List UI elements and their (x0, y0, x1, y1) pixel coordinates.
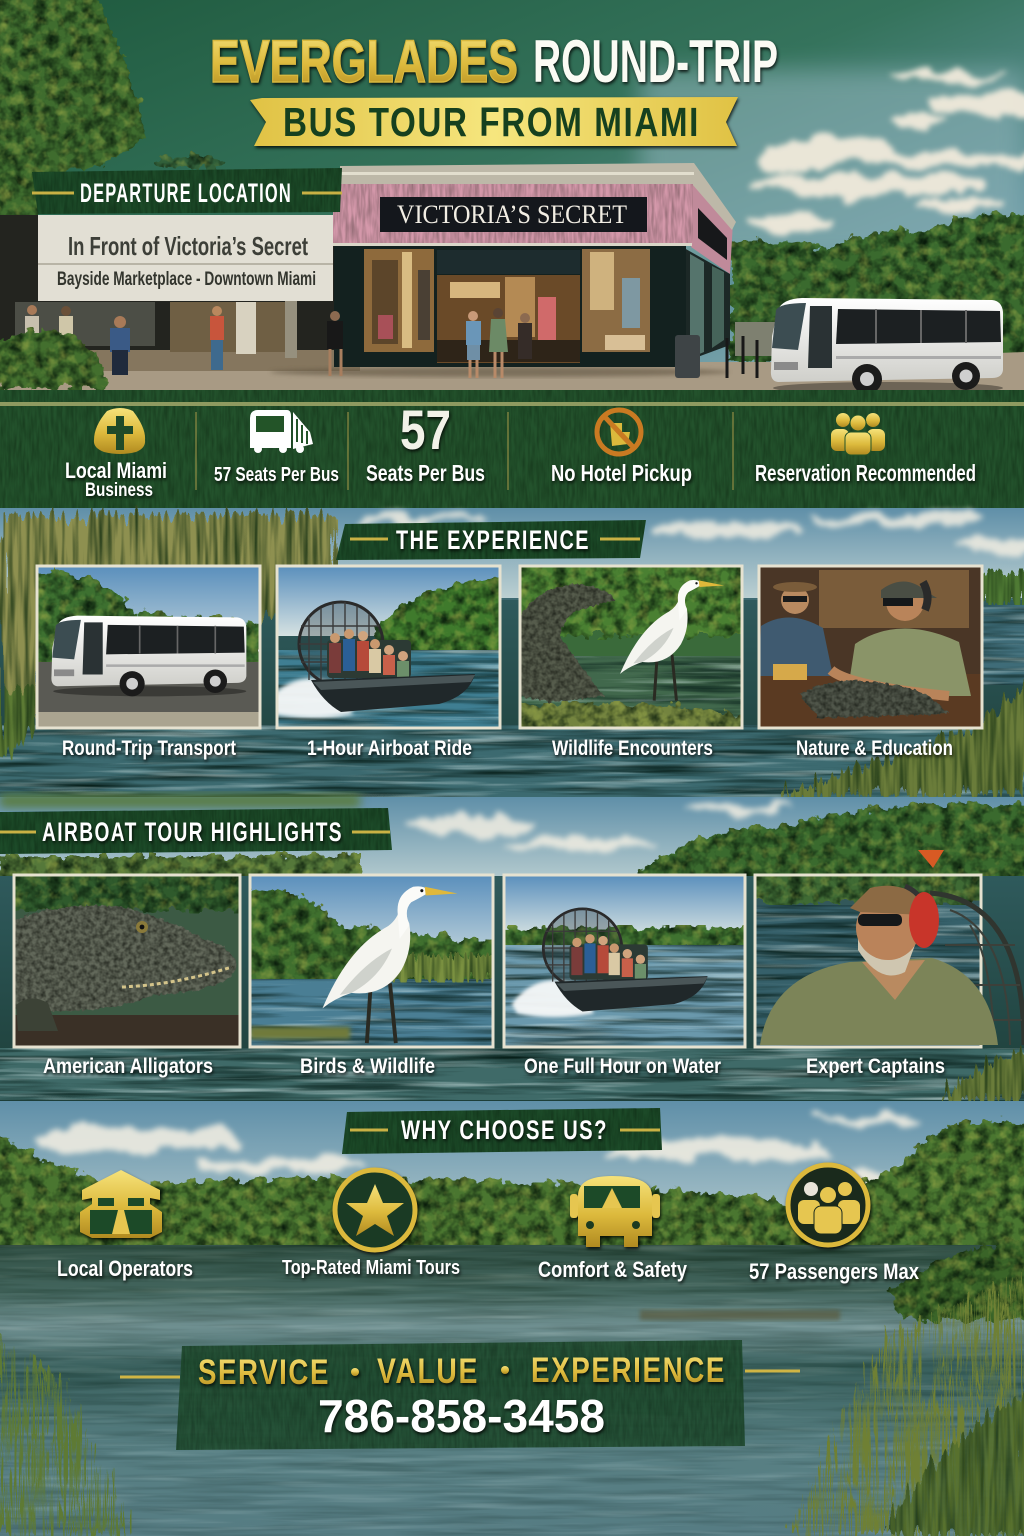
ground (0, 322, 1024, 392)
stat: local miami business (65, 458, 167, 501)
photo: nature and education (759, 566, 982, 728)
icon: local business badge (94, 408, 145, 454)
heading: the experience (336, 520, 646, 560)
icon captions: why choose us: Comfort & Safety (538, 1257, 688, 1282)
icon: star badge (335, 1170, 415, 1250)
heading: the experience: THE EXPERIENCE (396, 525, 590, 555)
tour bus (771, 298, 1003, 394)
roof cornice (340, 163, 736, 230)
stat: 57 seats: Seats Per Bus (366, 460, 485, 486)
departure ribbon: DEPARTURE LOCATION (80, 178, 292, 208)
slogan: VALUE (377, 1352, 479, 1391)
stat: no hotel pickup: No Hotel Pickup (551, 460, 692, 486)
icon captions: why choose us (57, 1256, 920, 1284)
photo captions: highlights: One Full Hour on Water (524, 1055, 721, 1078)
departure ribbon (32, 168, 342, 214)
heading: airboat tour highlights: AIRBOAT TOUR HIGHLIGHTS (42, 817, 343, 847)
photo: wildlife encounters (510, 556, 752, 736)
storefront: Victoria's Secret (0, 163, 757, 378)
departure address panel: In Front of Victoria’s Secret (68, 231, 308, 261)
airboat fan cage and captain (760, 850, 1024, 1045)
stat: 57 seats per bus: 57 Seats Per Bus (214, 464, 339, 486)
photo: one full hour on water (494, 875, 755, 1047)
photo captions: experience: Wildlife Encounters (552, 737, 713, 760)
pink fascia (333, 184, 693, 244)
photo captions: highlights: American Alligators (43, 1055, 213, 1078)
icon: bus (250, 410, 313, 453)
store lower front (334, 245, 686, 367)
icon captions: why choose us: Local Operators (57, 1256, 193, 1281)
stat: 57 seats (366, 398, 485, 486)
photo captions: experience (62, 737, 953, 760)
photo: american alligators (4, 865, 250, 1047)
heading: why choose us (342, 1108, 662, 1154)
stat: local miami business: Business (85, 480, 153, 501)
info band (0, 390, 1024, 508)
icon captions: why choose us: Top-Rated Miami Tours (282, 1257, 460, 1279)
photo captions: highlights: Birds & Wildlife (300, 1055, 435, 1078)
photo captions: experience: Nature & Education (796, 737, 953, 760)
photo captions: highlights (43, 1055, 945, 1078)
people in front of store (25, 305, 532, 378)
call to action panel (120, 1340, 800, 1450)
departure address panel (38, 215, 333, 301)
icon: comfort and safety bus (570, 1176, 660, 1247)
bollards (727, 336, 757, 378)
store sign: VICTORIA’S SECRET (397, 200, 627, 229)
subtitle ribbon: BUS TOUR FROM MIAMI (283, 99, 700, 145)
slogan: EXPERIENCE (531, 1351, 726, 1390)
title: EVERGLADES (210, 28, 518, 95)
left window (364, 249, 434, 352)
heading: airboat tour highlights (0, 808, 392, 854)
stat: 57 seats: 57 (400, 398, 451, 461)
right window (582, 249, 650, 352)
trees: hero left (0, 0, 226, 250)
photo: round-trip transport (27, 566, 260, 728)
phone number: 786-858-3458 (318, 1390, 605, 1442)
photo: expert captains (745, 865, 991, 1047)
icon: reservation group (831, 413, 885, 455)
photo: birds and wildlife (240, 875, 493, 1047)
icon: passengers badge (788, 1165, 868, 1245)
icon: no hotel pickup (597, 410, 641, 454)
section background: the experience (0, 508, 1024, 800)
stat: local miami business: Local Miami (65, 458, 167, 483)
icon captions: why choose us: 57 Passengers Max (749, 1259, 920, 1284)
background: hero sky (0, 0, 1024, 400)
photo captions: experience: Round-Trip Transport (62, 737, 236, 760)
trees: hero right (730, 213, 1024, 360)
section background: airboat highlights (0, 795, 1024, 1103)
title: ROUND-TRIP (533, 28, 778, 95)
entrance (437, 250, 580, 363)
bush (0, 330, 106, 388)
section background: why choose us (0, 1101, 1024, 1536)
trash can (675, 335, 700, 378)
photo captions: experience: 1-Hour Airboat Ride (307, 737, 472, 760)
photo captions: highlights: Expert Captains (806, 1055, 945, 1078)
heading: why choose us: WHY CHOOSE US? (401, 1115, 608, 1145)
slogan (198, 1351, 726, 1392)
departure address panel: Bayside Marketplace - Downtown Miami (57, 269, 316, 290)
icon: local operators (80, 1170, 162, 1238)
slogan: SERVICE (198, 1353, 330, 1392)
photo: airboat ride (265, 566, 517, 728)
